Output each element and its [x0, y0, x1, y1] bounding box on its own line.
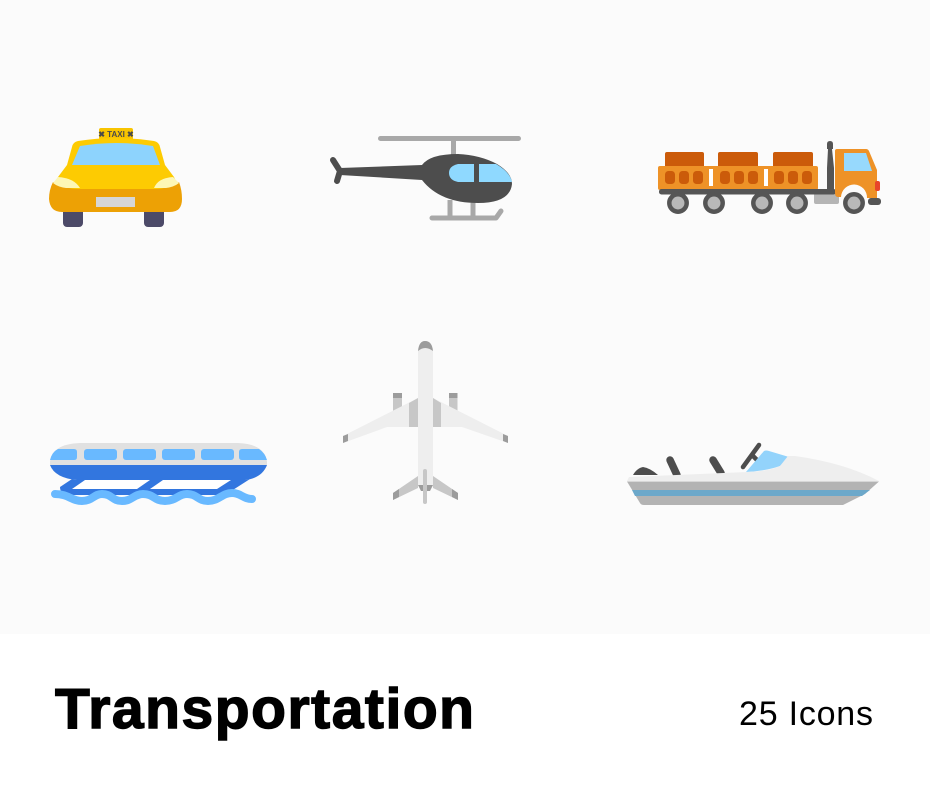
icon: helicopter — [333, 136, 521, 218]
icon: flatbed truck — [658, 141, 881, 212]
icon: hydrofoil train boat — [50, 443, 267, 501]
icon: airplane — [343, 341, 508, 504]
icon count label: 25 Icons — [739, 695, 873, 733]
icon: speedboat — [627, 445, 879, 505]
icon: taxi — [49, 128, 182, 227]
title: Transportation — [55, 677, 474, 741]
icon: taxi: ✖ TAXI ✖ — [98, 130, 134, 139]
